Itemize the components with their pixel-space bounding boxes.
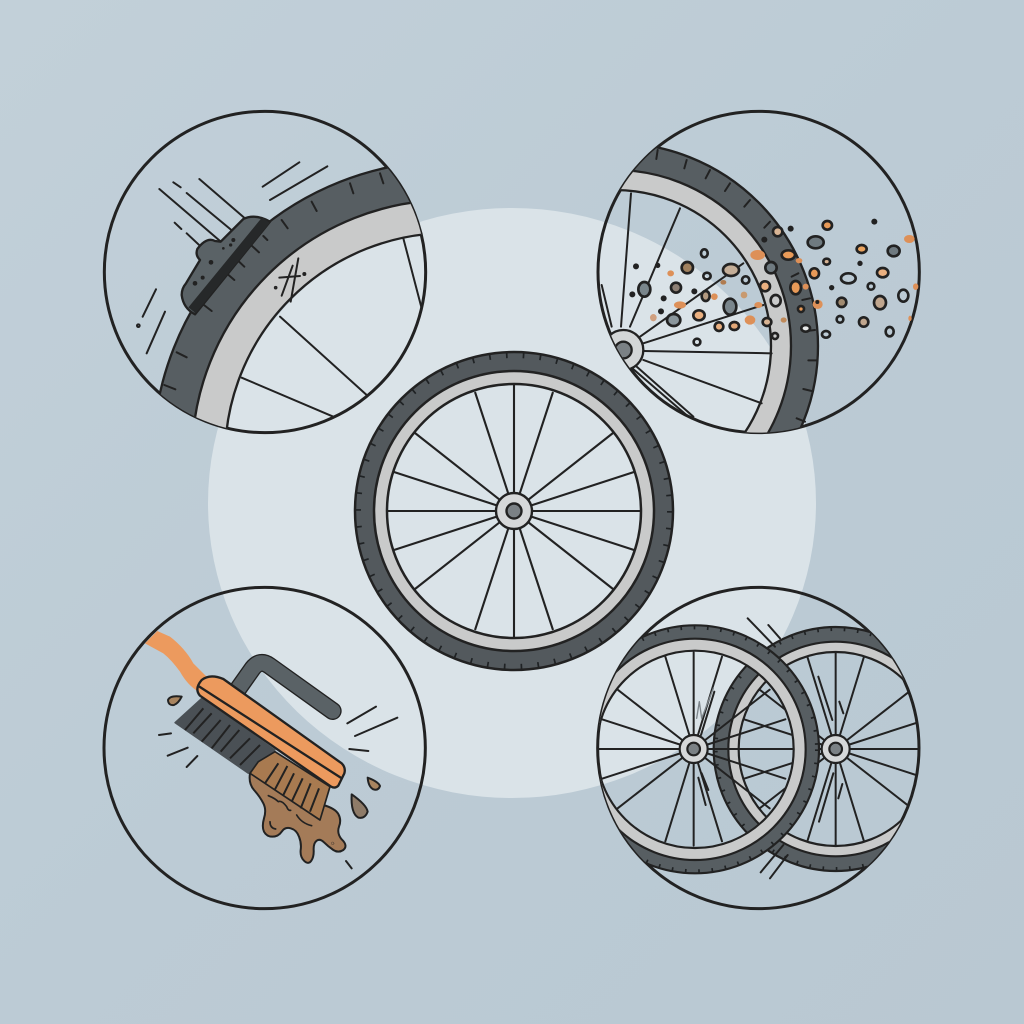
panel: brush cleaning mud	[104, 587, 425, 909]
spokes	[602, 193, 772, 417]
panel: brake pad on tire	[102, 110, 428, 434]
left spokes and hub	[597, 652, 794, 846]
panel: two overlapping wheels	[596, 586, 920, 910]
central wheel	[355, 352, 673, 670]
rim section	[620, 171, 790, 433]
left rim	[590, 645, 800, 854]
mud detail strokes	[268, 796, 312, 829]
debris rocks	[638, 221, 908, 345]
wheel outlines	[355, 352, 673, 670]
hub	[496, 493, 532, 529]
orange brush head	[197, 676, 345, 788]
orange brush neck	[145, 631, 208, 692]
panel outline circle	[598, 587, 919, 909]
right spokes	[744, 653, 918, 845]
infographic canvas	[102, 110, 921, 910]
tire section	[160, 168, 410, 417]
motion lines	[143, 162, 327, 353]
tread ticks	[358, 355, 670, 667]
dark bristles	[175, 698, 275, 773]
spoke vibration zigzag	[697, 688, 713, 718]
pad rivets	[193, 238, 235, 286]
right wheel	[712, 626, 918, 872]
paint smudges	[650, 235, 918, 325]
mud splat	[250, 772, 345, 863]
panel outline circle	[598, 111, 919, 433]
dark grip handle	[237, 663, 333, 711]
right tire	[714, 628, 890, 870]
right hub	[822, 735, 850, 763]
mud drops	[168, 696, 380, 818]
left spokes	[597, 652, 794, 846]
hub	[610, 328, 644, 369]
left tread ticks	[642, 626, 818, 872]
left wheel	[571, 625, 819, 873]
wheel arcs	[620, 146, 820, 432]
left outlines	[571, 625, 819, 873]
panel outline circle	[104, 111, 426, 433]
clipped wheel section	[159, 166, 422, 428]
tread ticks	[164, 173, 383, 389]
brake pad band	[192, 220, 266, 310]
rim scratch	[137, 258, 305, 327]
rim section	[195, 203, 422, 428]
tread ticks	[656, 150, 817, 422]
panel: flying debris	[596, 110, 921, 434]
clipped wheels	[599, 624, 918, 874]
scrub motion lines	[159, 707, 397, 868]
right tread ticks	[714, 628, 872, 870]
wheel arcs	[159, 166, 422, 428]
clipped wheel section	[600, 146, 820, 433]
spokes	[242, 238, 422, 417]
spokes	[388, 385, 640, 637]
mud-covered bristles	[250, 752, 330, 820]
rim	[380, 378, 648, 644]
right outlines	[712, 626, 904, 872]
left hub	[680, 735, 708, 763]
debris dots	[629, 219, 877, 314]
tire	[364, 362, 664, 660]
right rim	[730, 643, 904, 855]
wobble motion lines	[698, 618, 843, 878]
panel outline circle	[104, 587, 425, 909]
brake pad	[182, 217, 270, 314]
tire section	[634, 148, 817, 432]
left tire	[618, 626, 818, 872]
central light disc	[208, 208, 816, 798]
